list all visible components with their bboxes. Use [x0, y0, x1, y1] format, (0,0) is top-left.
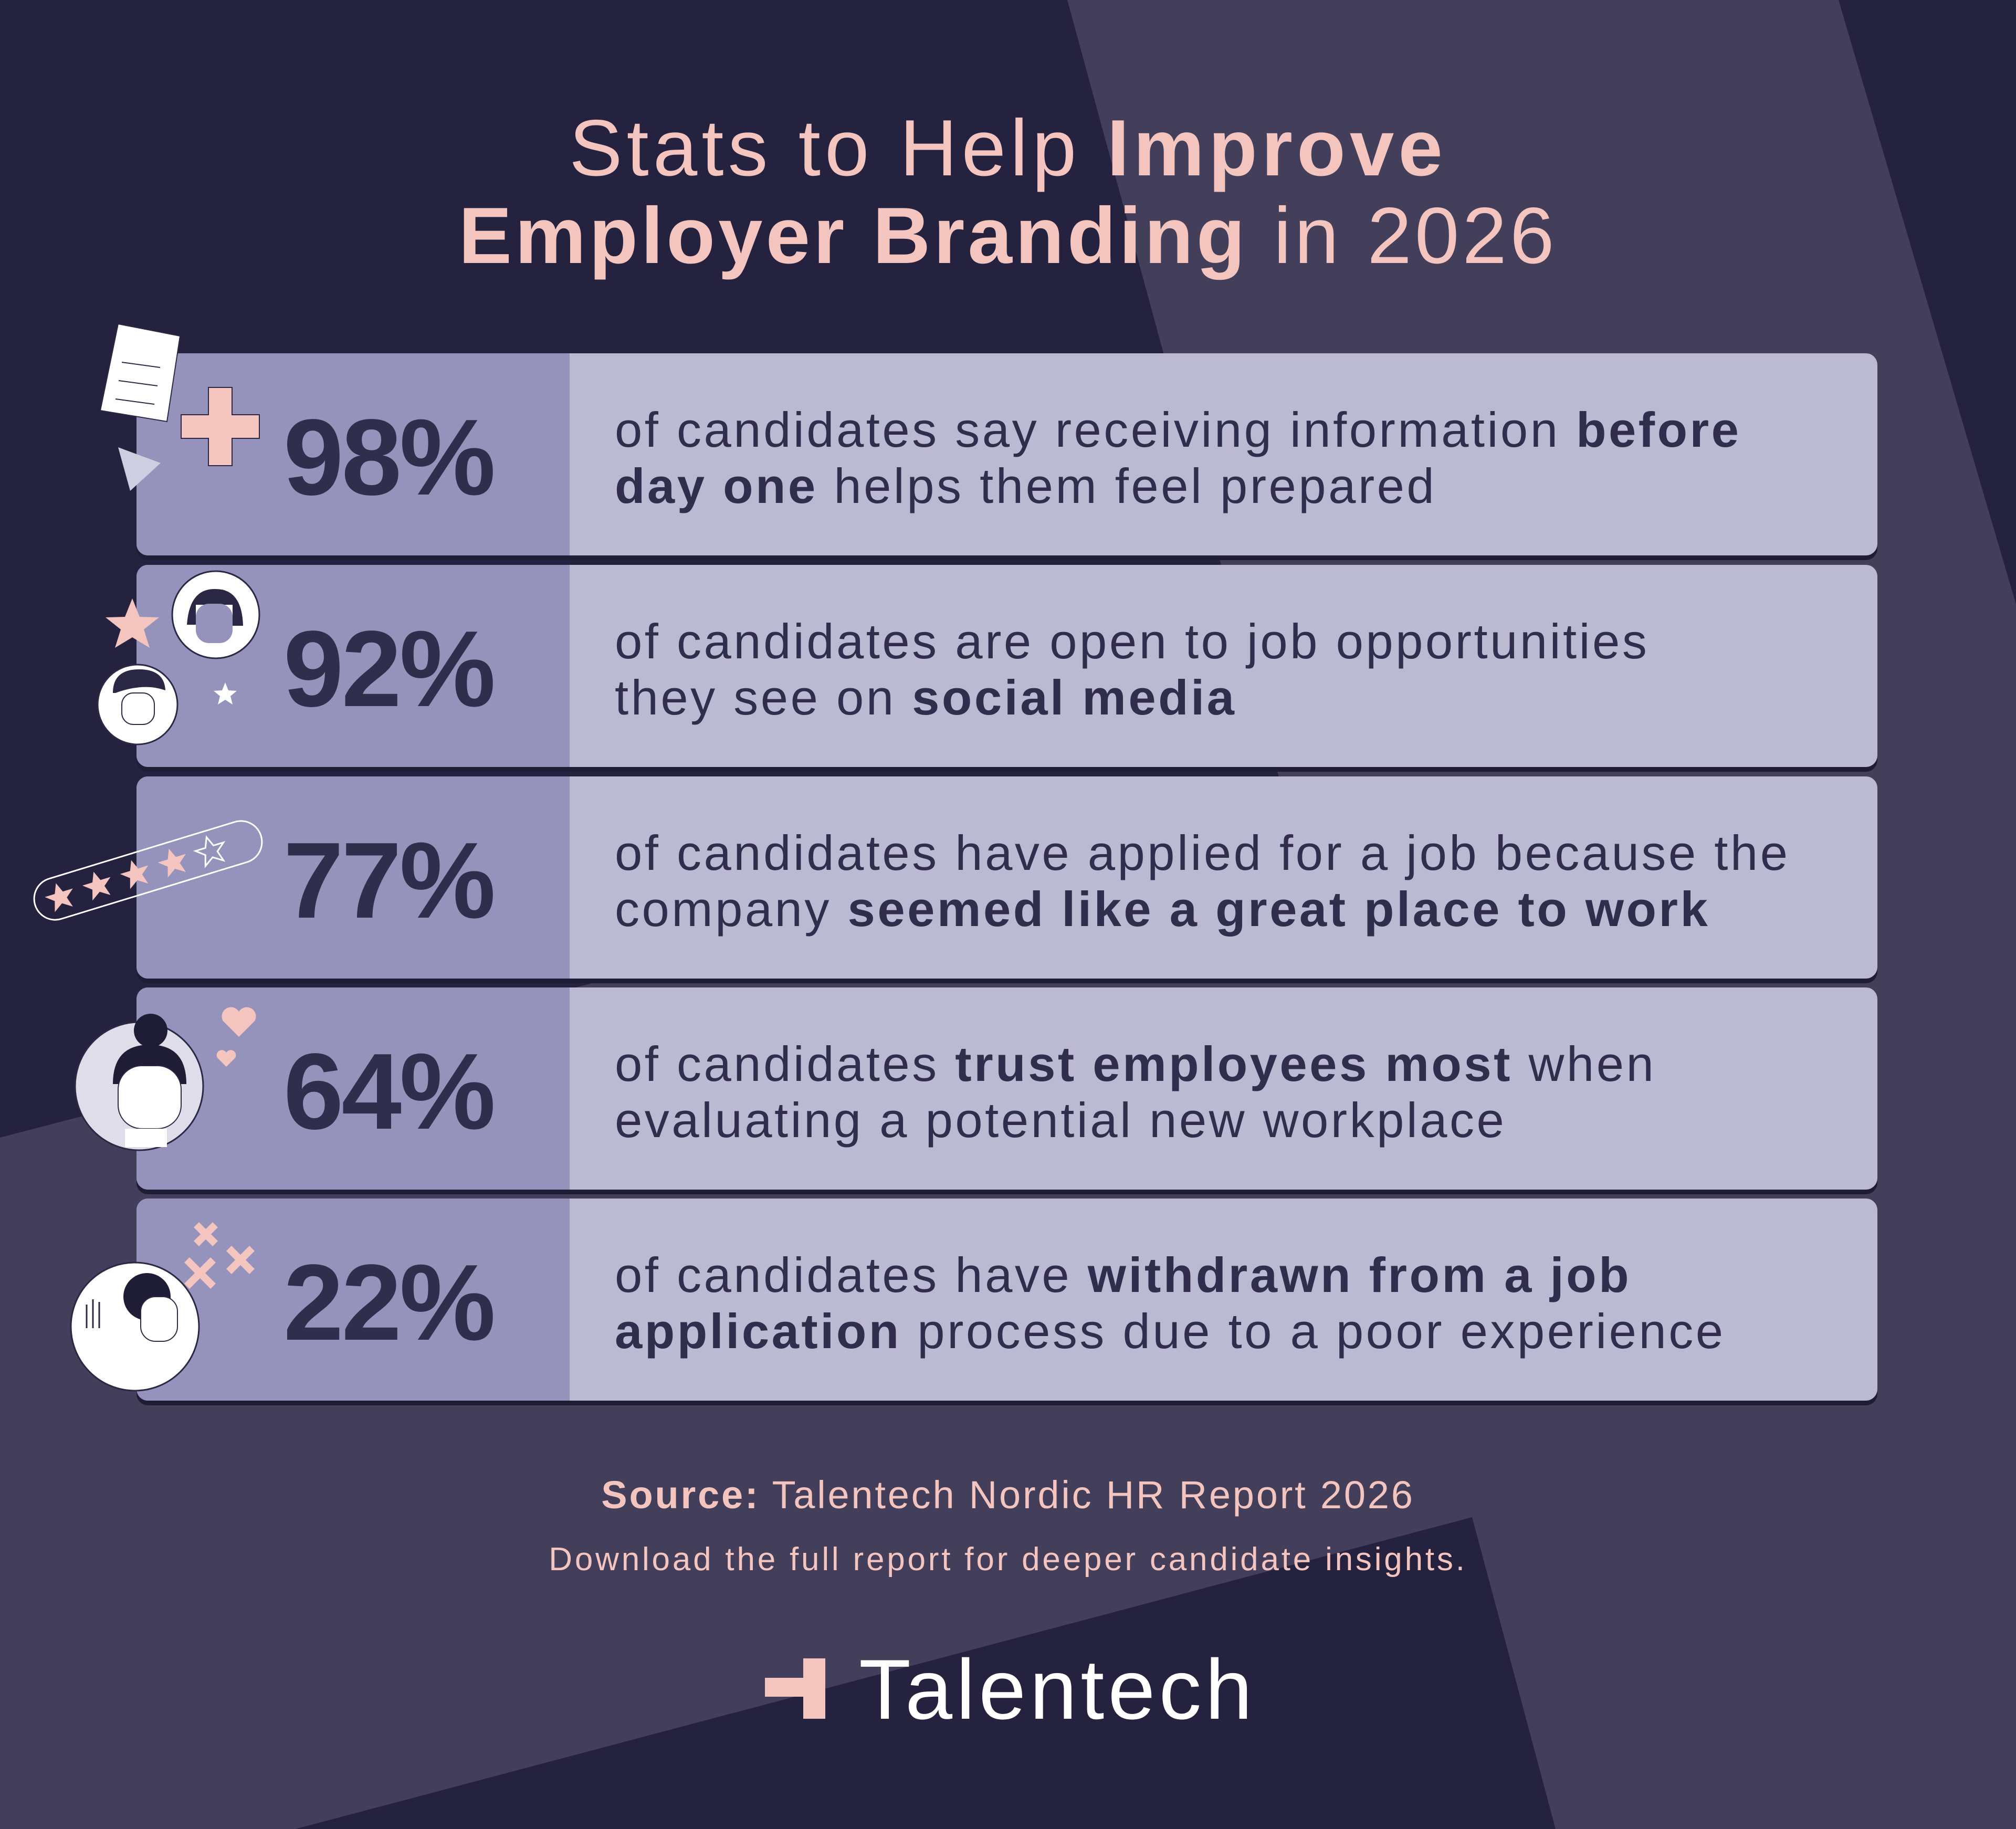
text 98: of candidates say receiving information before [615, 402, 1741, 457]
title [459, 103, 1557, 280]
title: Stats to Help Improve [569, 103, 1447, 193]
icon: woman avatar [172, 571, 259, 658]
stat 92: 92% [284, 608, 494, 729]
icon: document [100, 324, 180, 422]
icon: small star [214, 682, 237, 705]
icon: triangle [118, 447, 161, 491]
icon: waving avatar [71, 1263, 199, 1391]
text 77 [615, 825, 1790, 937]
icon: rating pill [29, 816, 267, 925]
text 22: application process due to a poor experience [615, 1304, 1726, 1359]
title: Employer Branding in 2026 [459, 191, 1557, 280]
card: 92% [136, 565, 1877, 767]
text 98: day one helps them feel prepared [615, 458, 1436, 513]
text 77: company seemed like a great place to work [615, 881, 1710, 937]
text 77: of candidates have applied for a job because the [615, 825, 1790, 880]
text 92 [615, 614, 1649, 725]
stat 64: 64% [284, 1031, 494, 1152]
download note: Download the full report for deeper candidate insights. [549, 1541, 1467, 1578]
logo [765, 1642, 1256, 1737]
text 92: of candidates are open to job opportunities [615, 614, 1649, 669]
text 22 [615, 1247, 1726, 1359]
text 98 [615, 402, 1741, 513]
icon: plus [181, 387, 259, 466]
logo mark [765, 1658, 825, 1719]
icon: x marks [187, 1225, 252, 1286]
stat 77: 77% [284, 820, 494, 941]
source line: Source: Talentech Nordic HR Report 2026 [601, 1473, 1415, 1517]
icon: star pink [106, 598, 159, 648]
icon: bun avatar [75, 1014, 203, 1150]
icon: hearts [217, 1007, 256, 1067]
card: 64% [136, 987, 1877, 1190]
logo text: Talentech [859, 1642, 1256, 1737]
text 64: evaluating a potential new workplace [615, 1092, 1506, 1148]
icon: man avatar [98, 665, 177, 744]
stat 22: 22% [284, 1242, 494, 1363]
stat 98: 98% [284, 397, 494, 518]
card: 77% [136, 776, 1877, 979]
text 64: of candidates trust employees most when [615, 1036, 1656, 1091]
text 92: they see on social media [615, 670, 1236, 725]
text 22: of candidates have withdrawn from a job [615, 1247, 1631, 1302]
card: 98% [136, 353, 1877, 555]
icons overlay [34, 324, 262, 1391]
card: 22% [136, 1199, 1877, 1401]
text 64 [615, 1036, 1656, 1148]
